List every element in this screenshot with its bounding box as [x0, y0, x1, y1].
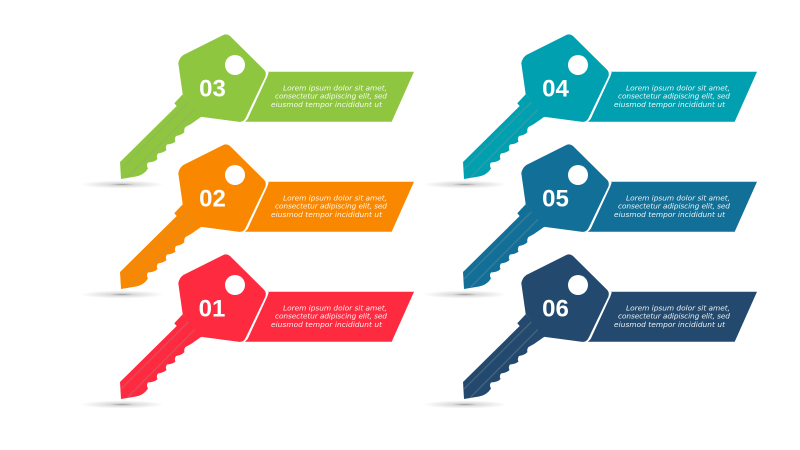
- text block 01: consectetur adipiscing elit, sed: [275, 312, 387, 321]
- number 01: 01: [199, 296, 225, 322]
- text block 04: consectetur adipiscing elit, sed: [618, 92, 730, 101]
- icon: teal key with ribbon: [423, 34, 757, 188]
- text block 04: Lorem ipsum dolor sit amet,: [626, 83, 730, 92]
- number 05: 05: [542, 186, 569, 212]
- panel: key 03: [80, 34, 414, 188]
- text block 03: Lorem ipsum dolor sit amet,: [283, 83, 387, 92]
- panel: key 04: [423, 34, 757, 188]
- panel: key 06: [423, 254, 757, 408]
- panel: key 01: [80, 254, 414, 408]
- text block 06: [614, 303, 730, 329]
- text block 05: Lorem ipsum dolor sit amet,: [626, 193, 730, 202]
- text block 02: Lorem ipsum dolor sit amet,: [283, 193, 387, 202]
- number 04: 04: [542, 76, 569, 102]
- panel: key 02: [80, 144, 414, 298]
- text block 05: [614, 193, 730, 219]
- text block 06: consectetur adipiscing elit, sed: [618, 312, 730, 321]
- number 03: 03: [199, 76, 226, 102]
- text block 03: [271, 83, 387, 109]
- text block 01: Lorem ipsum dolor sit amet,: [283, 303, 387, 312]
- text block 02: eiusmod tempor incididunt ut: [271, 210, 383, 219]
- number 06: 06: [542, 296, 569, 322]
- icon: orange key with ribbon: [80, 144, 414, 298]
- text block 01: eiusmod tempor incididunt ut: [271, 320, 383, 329]
- icon: green key with ribbon: [80, 34, 414, 188]
- text block 05: consectetur adipiscing elit, sed: [618, 202, 730, 211]
- text block 04: eiusmod tempor incididunt ut: [614, 100, 726, 109]
- text block 01: [271, 303, 387, 329]
- icon: red key with ribbon: [80, 254, 414, 408]
- icon: navy key with ribbon: [423, 254, 757, 408]
- text block 05: eiusmod tempor incididunt ut: [614, 210, 726, 219]
- text block 03: eiusmod tempor incididunt ut: [271, 100, 383, 109]
- text block 06: Lorem ipsum dolor sit amet,: [626, 303, 730, 312]
- text block 02: consectetur adipiscing elit, sed: [275, 202, 387, 211]
- text block 04: [614, 83, 730, 109]
- text block 03: consectetur adipiscing elit, sed: [275, 92, 387, 101]
- text block 02: [271, 193, 387, 219]
- icon: blue key with ribbon: [423, 144, 757, 298]
- number 02: 02: [199, 186, 226, 212]
- panel: key 05: [423, 144, 757, 298]
- text block 06: eiusmod tempor incididunt ut: [614, 320, 726, 329]
